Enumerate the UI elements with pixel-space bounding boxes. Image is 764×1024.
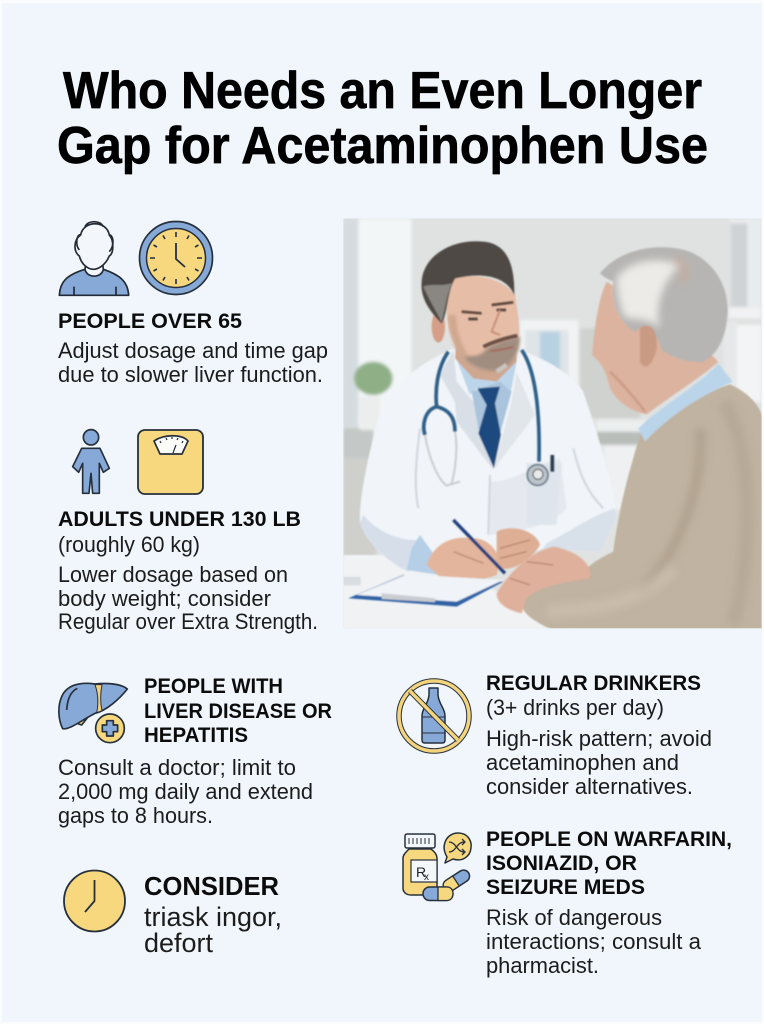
text: adults under 130 lb [58, 532, 318, 634]
text: consider [144, 902, 282, 958]
icon: prescription bottle and pills: x [424, 872, 429, 883]
icon: clock, consider [64, 870, 125, 932]
neck and face [455, 328, 517, 382]
text: regular drinkers: (3+ drinks per day) [486, 695, 664, 720]
text: adults under 130 lb: Regular over Extra Strength. [58, 609, 318, 634]
title: Who Needs an Even Longer [63, 62, 702, 120]
text: people over 65 [58, 338, 328, 387]
text: adults under 130 lb: (roughly 60 kg) [58, 532, 200, 557]
patient sweater [522, 384, 763, 630]
heading: consider: CONSIDER [144, 871, 279, 901]
text: warfarin isoniazid seizure meds: Risk of dangerous [486, 905, 662, 930]
desk [343, 555, 553, 628]
text: adults under 130 lb: body weight; consider [58, 586, 271, 611]
text: warfarin isoniazid seizure meds: interactions; consult a [486, 929, 702, 954]
text: warfarin isoniazid seizure meds [486, 905, 702, 978]
heading: liver disease or hepatitis [144, 675, 332, 747]
doctor hands and pen [407, 535, 450, 577]
heading: liver disease or hepatitis: LIVER DISEASE OR [144, 700, 332, 723]
heading: warfarin isoniazid seizure meds [486, 828, 732, 899]
heading: warfarin isoniazid seizure meds: SEIZURE MEDS [486, 876, 645, 899]
icon: no alcohol [399, 681, 469, 751]
text: regular drinkers [486, 695, 712, 799]
text: regular drinkers: consider alternatives. [486, 774, 693, 799]
text: people over 65: Adjust dosage and time gap [58, 338, 328, 363]
icon: older person [59, 222, 129, 295]
text: regular drinkers: acetaminophen and [486, 750, 679, 775]
text: liver disease or hepatitis: Consult a doctor; limit to [58, 755, 296, 780]
text: regular drinkers: High-risk pattern; avoid [486, 726, 712, 751]
patient collar [638, 363, 733, 442]
icon: liver with plus badge [59, 683, 127, 743]
clipboard [348, 575, 503, 607]
heading: liver disease or hepatitis: PEOPLE WITH [144, 675, 283, 698]
text: people over 65: due to slower liver function. [58, 362, 323, 387]
icon: clock, people over 65 [140, 222, 212, 294]
text: liver disease or hepatitis: gaps to 8 hours. [58, 803, 213, 828]
heading: people over 65: PEOPLE OVER 65 [58, 310, 242, 333]
icon: prescription bottle and pills [403, 833, 472, 900]
doctor coat [359, 348, 614, 552]
patient head [592, 282, 718, 414]
heading: regular drinkers: REGULAR DRINKERS [486, 672, 701, 695]
patient hands [497, 547, 590, 613]
title: Gap for Acetaminophen Use [57, 117, 708, 175]
shirt [457, 361, 517, 395]
heading: adults under 130 lb: ADULTS UNDER 130 LB [58, 508, 301, 531]
icon: prescription bottle and pills: R [416, 864, 426, 880]
text: liver disease or hepatitis: 2,000 mg daily and extend [58, 779, 313, 804]
text: consider: defort [144, 928, 213, 958]
text: liver disease or hepatitis [58, 755, 313, 828]
tie [477, 387, 501, 468]
stethoscope [424, 352, 455, 435]
heading: warfarin isoniazid seizure meds: ISONIAZID, OR [486, 852, 637, 875]
title [57, 62, 708, 175]
photo: doctor consulting with older patient [343, 218, 763, 630]
heading: warfarin isoniazid seizure meds: PEOPLE ON WARFARIN, [486, 828, 732, 851]
icon: small adult figure [73, 430, 109, 493]
text: consider: triask ingor, [144, 902, 282, 932]
heading: liver disease or hepatitis: HEPATITIS [144, 724, 248, 747]
text: adults under 130 lb: Lower dosage based on [58, 562, 288, 587]
icon: weight scale [138, 430, 203, 494]
text: warfarin isoniazid seizure meds: pharmacist. [486, 953, 599, 978]
